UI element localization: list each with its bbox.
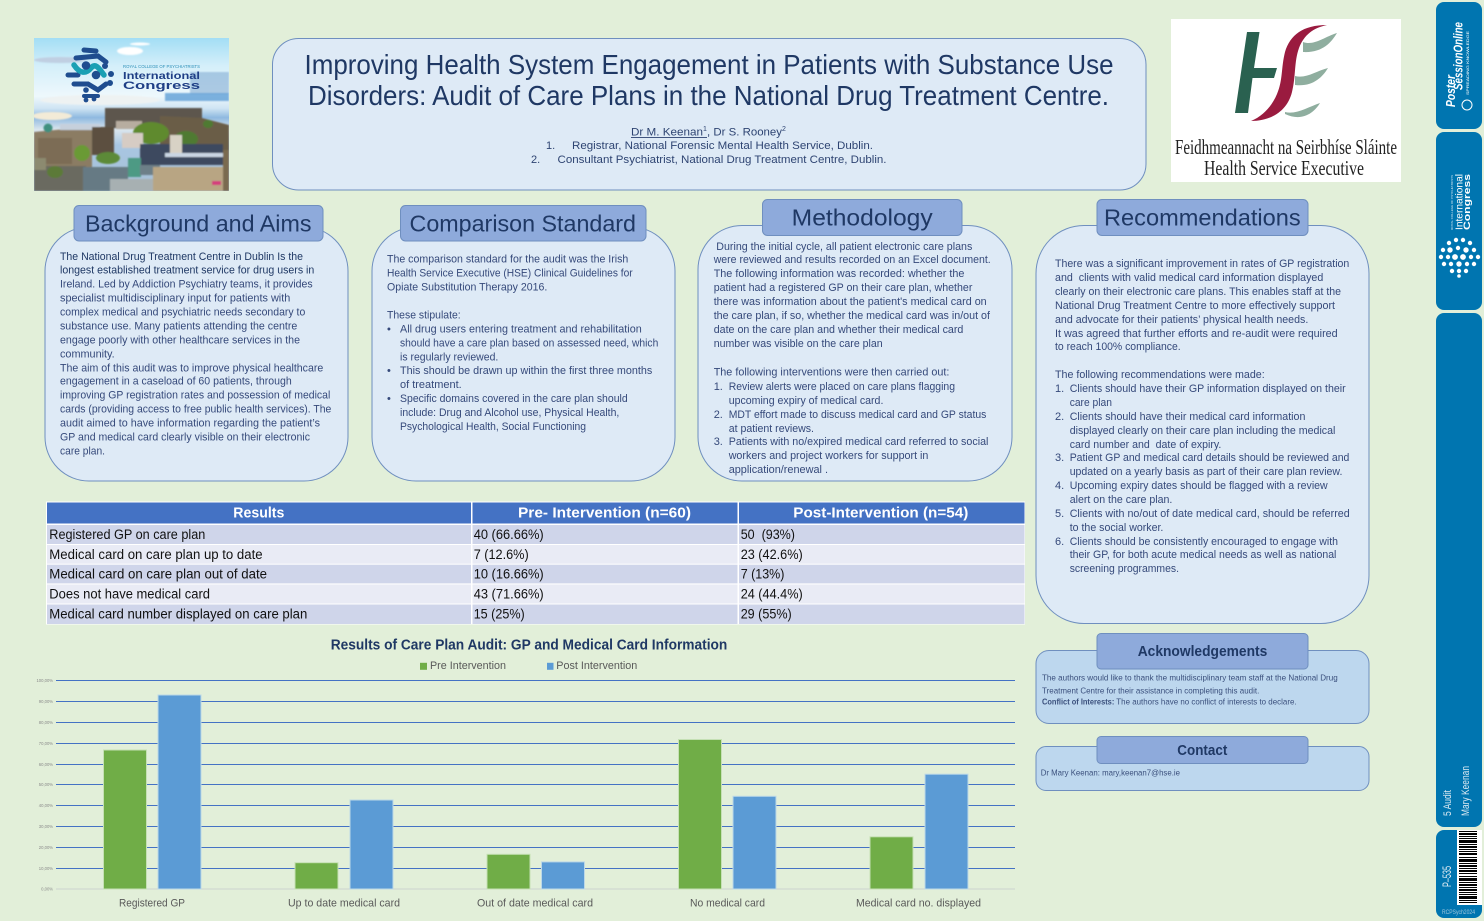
text block: background: audit aimed to have information regarding the patient’s xyxy=(60,417,320,429)
text block: methodology: MDT effort made to discuss medical card and GP status xyxy=(729,409,987,421)
text block: comparison standard: of treatment. xyxy=(400,379,462,391)
text block: recommendations: and advocate for their patients’ physical health needs. xyxy=(1055,314,1308,326)
category labels: Registered GP xyxy=(119,898,185,910)
results table: 23 (42.6%) xyxy=(741,547,803,562)
text block: comparison standard: Opiate Substitution Therapy 2016. xyxy=(387,282,547,294)
text block: methodology: 3. xyxy=(714,436,723,448)
sidebar tab: International Congress xyxy=(1436,132,1482,310)
results table: 29 (55%) xyxy=(741,606,792,621)
category labels: Medical card no. displayed xyxy=(856,898,981,910)
text block: recommendations: alert on the care plan. xyxy=(1070,494,1172,506)
text block: methodology: 2. xyxy=(714,409,723,421)
text block: recommendations: 4. xyxy=(1055,480,1064,492)
heading: recommendations: Recommendations xyxy=(1104,204,1301,230)
text block: background: Ireland. Led by Addiction Psychiatry teams, it provides xyxy=(60,278,313,290)
panel: recommendations xyxy=(1036,200,1369,624)
results table: 15 (25%) xyxy=(474,606,525,621)
y axis labels: 50,00% xyxy=(39,782,53,787)
category labels: No medical card xyxy=(690,898,765,910)
authors and affiliations: , Dr S. Rooney xyxy=(707,126,783,138)
text block: comparison standard: This should be drawn up within the first three months xyxy=(400,365,653,377)
text block: methodology: During the initial cycle, all patient electronic care plans xyxy=(716,241,973,253)
text block: methodology: number was visible on the care plan xyxy=(714,338,883,350)
text block: methodology: were reviewed and results recorded on an Excel document. xyxy=(713,254,991,266)
results table: 40 (66.66%) xyxy=(474,527,544,542)
text block: acknowledgements: The authors would like to thank the multidisciplinary team staff at the National Drug xyxy=(1042,673,1338,683)
text block: background xyxy=(60,251,331,457)
text block: background: engagement in a caseload of 60 patients, through xyxy=(60,375,292,387)
text block: comparison standard: All drug users entering treatment and rehabilitation xyxy=(400,324,642,336)
text block: methodology: The following interventions were then carried out: xyxy=(714,367,949,379)
heading: acknowledgements xyxy=(1097,634,1308,669)
sidebar tab: Poster Session Online: SessionOnline xyxy=(1450,22,1466,90)
logo: Health Service Executive: Feidhmeannacht na Seirbhíse Sláinte xyxy=(1175,135,1397,159)
text block: methodology xyxy=(713,241,991,476)
sidebar tab: poster number and barcode xyxy=(1436,830,1482,918)
chart legend: Post Intervention xyxy=(556,660,637,672)
text block: comparison standard: These stipulate: xyxy=(387,310,461,322)
results table: Medical card number displayed on care plan xyxy=(49,606,307,621)
category labels: Up to date medical card xyxy=(288,898,400,910)
sidebar tab: topic and author xyxy=(1436,313,1482,827)
text block: recommendations: 6. xyxy=(1055,536,1064,548)
results table: 50 (93%) xyxy=(741,527,795,542)
text block: background: The National Drug Treatment Centre in Dublin Is the xyxy=(60,251,303,263)
text block: recommendations: Clients should have their medical card information xyxy=(1070,411,1305,423)
image: congress logo over Edinburgh skyline: International xyxy=(123,70,200,82)
text block: background: The aim of this audit was to improve physical healthcare xyxy=(60,362,323,374)
text block: comparison standard: include: Drug and Alcohol use, Physical Health, xyxy=(400,407,619,419)
y axis labels: 40,00% xyxy=(39,803,53,808)
results table: Does not have medical card xyxy=(49,586,210,601)
text block: comparison standard: • xyxy=(387,365,391,377)
authors and affiliations xyxy=(531,126,886,166)
panel: acknowledgements xyxy=(1036,634,1369,724)
authors and affiliations: 1. xyxy=(546,140,555,152)
heading: background and aims xyxy=(74,206,323,241)
heading: recommendations xyxy=(1097,200,1308,236)
text block: recommendations: updated on a yearly basis as part of their care plan review. xyxy=(1070,466,1342,478)
panel: contact xyxy=(1036,736,1369,790)
text block: recommendations: Upcoming expiry dates should be flagged with a review xyxy=(1070,480,1328,492)
heading: methodology xyxy=(762,200,962,236)
results table: Medical card on care plan up to date xyxy=(49,547,263,562)
results table: 7 (12.6%) xyxy=(474,547,529,562)
authors and affiliations: 1 xyxy=(703,126,707,133)
text block: methodology: application/renewal . xyxy=(729,464,828,476)
results table: 10 (16.66%) xyxy=(474,566,544,581)
text block: recommendations: to reach 100% compliance. xyxy=(1055,341,1181,353)
chart title: Results of Care Plan Audit: GP and Medical Card Information xyxy=(331,638,727,654)
results table: Registered GP on care plan xyxy=(49,527,205,542)
text block: recommendations: clearly on their electronic care plans. This enables staff at the xyxy=(1055,286,1341,298)
text block: recommendations: 2. xyxy=(1055,411,1064,423)
image: congress logo over Edinburgh skyline xyxy=(32,38,229,191)
chart legend xyxy=(420,660,637,672)
y axis labels: 90,00% xyxy=(39,699,53,704)
y axis labels xyxy=(36,678,53,892)
text block: recommendations xyxy=(1055,258,1350,575)
heading: background and aims: Background and Aims xyxy=(85,210,312,236)
sidebar tab: International Congress: International xyxy=(1454,174,1466,230)
text block: recommendations: 3. xyxy=(1055,452,1064,464)
authors and affiliations: 2 xyxy=(782,126,786,133)
results table: 24 (44.4%) xyxy=(741,586,803,601)
text block: comparison standard: should have a care plan based on assessed need, which xyxy=(400,338,658,350)
logo: Health Service Executive: Health Service Executive xyxy=(1204,156,1364,180)
y axis labels: 10,00% xyxy=(39,866,53,871)
text block: acknowledgements: Treatment Centre for their assistance in completing this audit. xyxy=(1042,686,1259,696)
text block: recommendations: card number and date of expiry. xyxy=(1070,439,1221,451)
text block: background: GP and medical card clearly visible on their electronic xyxy=(60,431,310,443)
text block: background: cards (providing access to free public health services). The xyxy=(60,403,331,415)
results table: 7 (13%) xyxy=(741,566,784,581)
title: Improving Health System Engagement in Patients with Substance Use xyxy=(304,49,1114,80)
heading: comparison standard: Comparison Standard xyxy=(410,210,636,236)
results table: Results xyxy=(233,506,284,522)
results table: Medical card on care plan out of date xyxy=(49,566,267,581)
text block: methodology: there was information about the patient's medical card on xyxy=(714,296,987,308)
title xyxy=(304,49,1114,111)
authors and affiliations: Consultant Psychiatrist, National Drug Treatment Centre, Dublin. xyxy=(558,154,886,166)
y axis labels: 60,00% xyxy=(39,762,53,767)
heading: comparison standard xyxy=(400,206,646,241)
text block: methodology: the care plan, if so, whether the medical card was in/out of xyxy=(714,310,991,322)
authors and affiliations: 2. xyxy=(531,154,540,166)
text block: methodology: The following information was recorded: whether the xyxy=(714,268,964,280)
text block: background: complex medical and psychiatric needs secondary to xyxy=(60,306,305,318)
sidebar tab: International Congress: Congress xyxy=(1462,174,1473,230)
text block: acknowledgements xyxy=(1042,673,1338,707)
text block: background: care plan. xyxy=(60,445,105,457)
text block: comparison standard: Health Service Executive (HSE) Clinical Guidelines for xyxy=(387,268,633,280)
bars: no medical card xyxy=(678,740,776,889)
text block: recommendations: Clients should be consistently encouraged to engage with xyxy=(1070,536,1338,548)
text: contact details: Dr Mary Keenan: mary,keenan7@hse.ie xyxy=(1041,768,1180,778)
sidebar tab: International Congress: ROYAL COLLEGE OF PSYCHIATRISTS xyxy=(1450,175,1454,230)
text block: comparison standard: The comparison standard for the audit was the Irish xyxy=(387,254,628,266)
text block: recommendations: There was a significant improvement in rates of GP registration xyxy=(1055,258,1349,270)
text block: comparison standard: is regularly reviewed. xyxy=(400,352,498,364)
authors and affiliations: Dr M. Keenan xyxy=(631,126,703,138)
text block: recommendations: and clients with valid medical card information displayed xyxy=(1055,272,1323,284)
results table: 43 (71.66%) xyxy=(474,586,544,601)
sidebar tab: poster number and barcode: RCPSych2024 xyxy=(1442,909,1475,916)
heading: acknowledgements: Acknowledgements xyxy=(1138,644,1267,660)
text block: recommendations: Clients should have their GP information displayed on their xyxy=(1070,383,1346,395)
bar chart: results of care plan audit xyxy=(36,638,1015,910)
y axis labels: 70,00% xyxy=(39,741,53,746)
bars: registered GP xyxy=(104,695,201,889)
panel: comparison standard xyxy=(372,206,675,481)
text block: methodology: date on the care plan and whether their medical card xyxy=(714,324,963,336)
y axis labels: 30,00% xyxy=(39,824,53,829)
text block: recommendations: screening programmes. xyxy=(1070,563,1179,575)
panel: methodology xyxy=(698,200,1012,481)
text block: background: community. xyxy=(60,348,115,360)
sidebar tab: Poster Session Online: Poster xyxy=(1443,74,1458,107)
y axis labels: 80,00% xyxy=(39,720,53,725)
sidebar tab: Poster Session Online: SPREADING KNOWLEDGE xyxy=(1466,30,1470,95)
text block: comparison standard: • xyxy=(387,393,391,405)
panel: title xyxy=(272,38,1146,190)
panel: background and aims xyxy=(45,206,348,481)
category labels xyxy=(119,898,981,910)
text block: background: improving GP registration rates and possession of medical xyxy=(60,389,330,401)
text block: recommendations: displayed clearly on their care plan including the medical xyxy=(1070,425,1335,437)
heading: contact xyxy=(1097,736,1308,764)
text block: methodology: at patient reviews. xyxy=(729,423,814,435)
text block: comparison standard xyxy=(387,254,658,433)
y axis labels: 100,00% xyxy=(36,678,53,683)
bars: medical card number displayed xyxy=(870,774,968,889)
text block: recommendations: National Drug Treatment Centre to more effectively support xyxy=(1055,300,1335,312)
title: Disorders: Audit of Care Plans in the National Drug Treatment Centre. xyxy=(308,80,1109,111)
text block: methodology: patient had a registered GP on their care plan, whether xyxy=(714,282,973,294)
text block: recommendations: care plan xyxy=(1070,397,1112,409)
bars: up to date medical card xyxy=(295,800,393,889)
sidebar tab: poster number and barcode: P–535 xyxy=(1440,866,1454,887)
bars: out of date medical card xyxy=(487,854,584,889)
text block: background: substance use. Many patients attending the centre xyxy=(60,320,297,332)
text block: recommendations: Patient GP and medical card details should be reviewed and xyxy=(1070,452,1349,464)
text block: acknowledgements: The authors have no conflict of interests to declare. xyxy=(1116,697,1297,707)
results table xyxy=(46,502,1025,624)
sidebar tab: topic and author: 5 Audit xyxy=(1442,790,1454,816)
text block: recommendations: 1. xyxy=(1055,383,1064,395)
image: congress logo over Edinburgh skyline: Congress xyxy=(123,80,200,92)
text block: recommendations: It was agreed that further efforts and re-audit were required xyxy=(1055,328,1338,340)
text block: background: specialist multidisciplinary input for patients with xyxy=(60,292,290,304)
results table: Pre- Intervention (n=60) xyxy=(518,506,691,522)
y axis labels: 20,00% xyxy=(39,845,53,850)
logo: Health Service Executive xyxy=(1171,19,1401,182)
image: congress logo over Edinburgh skyline: ROYAL COLLEGE OF PSYCHIATRISTS xyxy=(123,64,200,69)
text block: background: engage poorly with other healthcare services in the xyxy=(60,334,300,346)
text block: recommendations: 5. xyxy=(1055,508,1064,520)
heading: methodology: Methodology xyxy=(792,204,933,230)
text block: methodology: 1. xyxy=(714,381,723,393)
text block: comparison standard: • xyxy=(387,324,391,336)
results table: Post-Intervention (n=54) xyxy=(793,506,968,522)
text block: comparison standard: Psychological Health, Social Functioning xyxy=(400,421,586,433)
category labels: Out of date medical card xyxy=(477,898,593,910)
sidebar tab: Poster Session Online xyxy=(1436,2,1482,129)
sidebar tab: topic and author: Mary Keenan xyxy=(1460,766,1472,816)
text block: acknowledgements: Conflict of Interests: xyxy=(1042,697,1114,707)
text block: recommendations: Clients with no/out of date medical card, should be referred xyxy=(1070,508,1350,520)
text block: recommendations: The following recommendations were made: xyxy=(1055,369,1265,381)
text block: methodology: Review alerts were placed on care plans flagging xyxy=(729,381,955,393)
text block: methodology: workers and project workers for support in xyxy=(728,450,928,462)
authors and affiliations: Registrar, National Forensic Mental Health Service, Dublin. xyxy=(572,140,873,152)
text block: recommendations: to the social worker. xyxy=(1070,522,1163,534)
text block: comparison standard: Specific domains covered in the care plan should xyxy=(400,393,628,405)
heading: contact: Contact xyxy=(1177,743,1227,759)
y axis labels: 0,00% xyxy=(41,886,53,892)
text block: methodology: Patients with no/expired medical card referred to social xyxy=(729,436,988,448)
text block: background: longest established treatment service for drug users in xyxy=(60,264,314,276)
text block: recommendations: their GP, for both acute medical needs as well as national xyxy=(1070,549,1336,561)
text block: methodology: upcoming expiry of medical card. xyxy=(729,395,883,407)
chart legend: Pre Intervention xyxy=(430,660,506,672)
